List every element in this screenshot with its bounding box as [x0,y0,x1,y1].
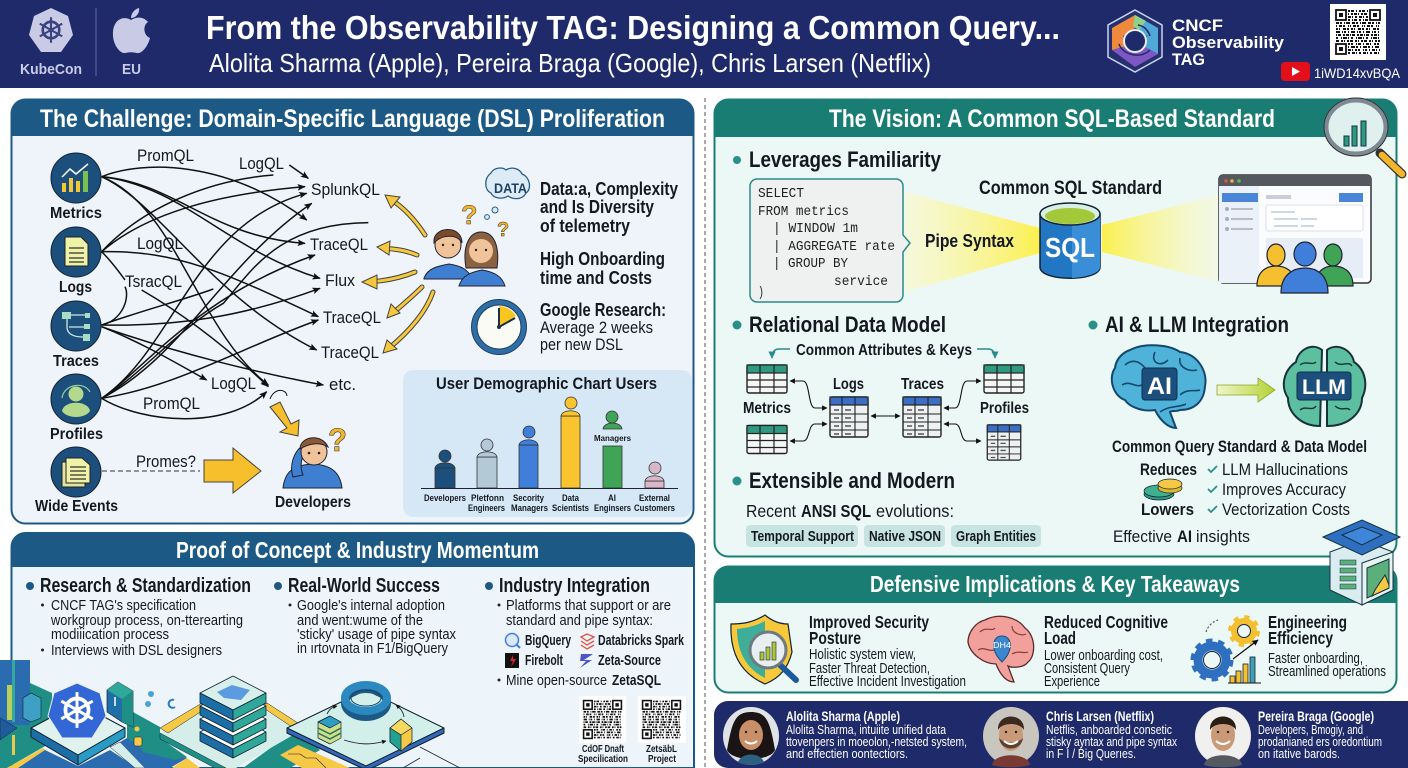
text: effective ai insights: Effective [1113,527,1172,546]
QR caption: spec: Specilication [578,754,628,765]
table: profiles top [984,365,1024,393]
text: complexity: Data:a, Complexity [540,178,679,199]
label: Databricks Spark: Databricks Spark [598,633,685,649]
chip: json: Native JSON [869,529,941,545]
panel header [11,533,694,567]
QR code [1330,4,1386,60]
CNCF label: TAG [1172,51,1205,69]
yellow arrowheads [362,195,400,353]
column: research: CNCF TAG's specification [51,597,196,614]
CNCF label: Observability [1172,34,1285,52]
icon: YouTube [1281,62,1310,81]
chart title: User Demographic Chart Users [436,374,657,393]
KubeCon label: KubeCon [20,61,82,78]
k8s logo [48,683,106,738]
icon: question marks: ? [497,219,509,241]
label: Logs: Logs [59,279,92,296]
text: complexity: of telemetry [540,215,631,236]
column: industry [485,575,685,689]
arrow: AI to LLM [1217,378,1275,402]
text: security posture [809,612,966,690]
code block: | GROUP BY [773,257,848,272]
DSL labels: PromQL [137,146,194,165]
icon: users [1257,242,1353,293]
text: ansi sql: evolutions: [876,501,954,521]
bio: Alolita: Alolita Sharma, intuiite unified data [786,723,946,737]
text: engineering efficiency: Engineering [1268,612,1347,632]
icon: question mark: ? [328,422,347,458]
column: research: Research & Standardization [40,575,251,597]
bio: Pereira: Pereira Braga (Google) [1258,708,1374,724]
header banner [0,0,1408,88]
chip: graph: Graph Entities [956,529,1036,545]
DSL labels: TraceQL [321,343,379,362]
column: industry: Industry Integration [499,575,650,597]
text: effective ai insights: insights [1196,527,1250,546]
text: ansi sql [746,501,954,521]
column: research: modiiication process [51,626,169,643]
text: google research: per new DSL [540,335,623,354]
benefit checks [1208,466,1217,512]
DSL labels: SplunkQL [311,180,380,199]
label: Developers: Developers [275,494,351,511]
heading: relational data model: Relational Data Model [749,312,946,337]
ring [345,685,387,717]
icon: magnifier [1324,98,1402,174]
text: cognitive load: Experience [1044,674,1100,690]
column: industry: Mine open-source [506,672,607,689]
icon: pink brain: DH4 [993,641,1012,650]
DSL labels: Flux [325,271,355,290]
benefits list: Improves Accuracy [1222,481,1347,499]
heading: leverages familiarity: Leverages Familiarity [749,147,942,172]
text: cognitive load: Reduced Cognitive [1044,612,1168,632]
label: pipe syntax: Pipe Syntax [925,230,1015,251]
ring platform [287,690,444,768]
bar label: managers: Managers [594,433,631,443]
icon: SQL database: SQL [1045,232,1095,263]
bio: Chris [1046,708,1178,761]
text: google research [540,299,666,354]
benefits list: Vectorization Costs [1222,501,1350,519]
code block: service [834,275,888,290]
icon: clock [472,300,526,354]
column: research [26,575,251,659]
icon: Apple logo [113,8,150,53]
bio: Alolita: ttovenpers in moeolon,-netsted system, [786,735,967,749]
panel: vision [714,98,1402,556]
benefits list: LLM Hallucinations [1222,461,1348,479]
section: extensible [732,476,742,486]
benefits list [1222,461,1350,519]
icon: SQL database [1040,203,1100,278]
table labels: Logs [833,376,864,393]
text: security posture: Improved Security [809,612,929,632]
axis labels: External [639,493,670,503]
chip: json [864,525,945,547]
icon: gears [1194,618,1261,683]
icon: confused users [424,229,505,286]
icon: LLM brain [1284,347,1365,426]
label: Traces: Traces [53,353,99,370]
chart: user demographic [403,370,692,517]
text: google research: Google Research: [540,299,666,320]
label: Wide Events: Wide Events [35,498,118,515]
photo: Chris [983,707,1039,767]
code block: | AGGREGATE rate [773,240,895,255]
DSL labels: LogQL [137,234,183,253]
column: real-world: Real-World Success [288,575,440,597]
yellow beams [905,192,1219,292]
bio: Pereira: on itative barods. [1258,747,1340,761]
icon: KubeCon logo [29,8,73,52]
chip: graph [951,525,1041,547]
icon: AI brain [1112,345,1206,428]
column: industry: standard and pipe syntax: [506,612,653,629]
text: security posture: Posture [809,628,861,648]
code block: ) [758,286,764,301]
attribute arrows [772,349,995,358]
title: From the Observability TAG: Designing a Common Query... [206,9,1060,46]
label: reduces: Reduces [1140,461,1197,479]
axis labels: Pletfonn [471,493,504,503]
DSL labels [125,146,381,471]
icon: Databricks [581,634,594,649]
text: ansi sql: ANSI SQL [801,501,871,521]
video id: 1iWD14xvBQA [1314,65,1401,81]
axis labels [424,493,675,513]
text: security posture: Effective Incident Investigation [809,674,966,690]
arrow: down to developers [270,390,299,436]
icon: Firebolt [505,653,519,668]
section: leverages familiarity [733,156,741,164]
section: ai [1088,320,1098,330]
text: complexity [540,178,679,236]
DSL labels: PromQL [143,394,200,413]
bars [435,397,664,488]
panel: defensive implications [714,566,1397,692]
heading: Defensive Implications & Key Takeaways [870,571,1240,597]
table labels: Profiles [980,400,1029,417]
axis labels: AI [608,493,616,503]
heading: Proof of Concept & Industry Momentum [176,537,539,563]
DSL labels: etc. [329,375,356,394]
QR caption: spec [578,744,628,765]
yellow arrows from users [368,199,433,349]
text: cognitive load: Consistent Query [1044,661,1131,677]
icon: shield [731,615,796,684]
table: metrics bottom [747,426,787,454]
axis labels: Scientists [552,503,589,513]
label: lowers: Lowers [1141,501,1194,519]
panel header [11,99,694,136]
text: engineering efficiency [1268,612,1386,680]
heading: ai: AI & LLM Integration [1105,312,1289,337]
code block: SELECT [758,187,804,202]
table: logs [830,397,868,437]
label: Profiles: Profiles [50,426,103,443]
label: common attributes: Common Attributes & Keys [796,342,972,359]
text: engineering efficiency: Efficiency [1268,628,1333,648]
bio: Chris: Chris Larsen (Netflix) [1046,708,1154,724]
pillar [107,682,133,727]
code block [750,179,910,302]
axis labels: Enginsers [594,503,631,513]
text: effective ai insights [1113,527,1250,546]
code block: | WINDOW 1m [773,222,858,237]
column: real-world: Google's internal adoption [297,597,445,614]
text: complexity: and Is Diversity [540,196,655,217]
column: research: workgroup process, on-tterearting [50,612,243,629]
EU label: EU [122,61,141,78]
photo: Alolita [723,707,779,765]
thought bubbles [485,207,498,219]
speakers subtitle: Alolita Sharma (Apple), Pereira Braga (Google), Chris Larsen (Netflix) [209,48,931,78]
label: Zeta-Source: Zeta-Source [598,653,661,669]
icon: data cloud: DATA [494,180,527,196]
icon: building with cap [1323,520,1400,605]
label: common sql standard: Common SQL Standard [979,178,1162,199]
icon: profiles [51,374,101,424]
small nodes [134,691,175,746]
QR code: spec [579,696,626,743]
column: real-world: in ırtovnata in F1/BigQuery [297,640,448,657]
k8s platform [31,703,125,765]
column: industry: ZetaSQL [612,672,661,689]
left tower [0,660,41,755]
bio: Alolita [786,708,967,761]
axis labels: Customers [634,503,675,513]
DSL labels: Promes? [136,452,196,471]
text: ansi sql: Recent [746,501,796,521]
bio: Chris: Netflis, anboarded consetic [1046,723,1172,737]
axis labels: Developers [424,493,466,503]
text: cognitive load: Lower onboarding cost, [1044,648,1163,664]
QR caption: zeta [646,744,677,765]
icon: confused developer [283,438,342,488]
label: Firebolt: Firebolt [525,653,563,669]
text: effective ai insights: AI [1177,527,1192,546]
text: onboarding [540,248,665,288]
table labels [743,376,1029,417]
table labels: Traces [901,376,944,393]
axis labels: Secority [513,493,544,503]
bio: Alolita: Alolita Sharma (Apple) [786,708,900,724]
label: Metrics: Metrics [50,205,102,222]
column: real-world: and went:wume of the [297,612,423,629]
table: metrics top [747,365,787,393]
column: industry: Platforms that support or are [506,597,671,614]
icon: wide events [51,447,101,497]
server stack [200,676,266,758]
icon: data cloud [486,168,529,199]
label: BigQuery: BigQuery [525,633,571,649]
icon: coins [1144,479,1182,500]
divider [704,98,706,768]
section: relational data model [732,320,742,330]
icon: metrics [51,153,101,203]
table labels: Metrics [743,400,791,417]
panel header [714,99,1397,137]
icon: LLM brain: LLM [1302,376,1346,399]
heading: extensible: Extensible and Modern [749,468,955,493]
column: real-world [274,575,456,657]
dashed link [102,470,200,472]
divider mark [95,8,97,76]
bio: Chris: stisky ayntax and pipe syntax [1046,735,1178,749]
DSL labels: TraceQL [310,235,368,254]
bio: Chris: in F I / Big Querıes. [1046,747,1136,761]
text: security posture: Faster Threat Detection, [809,661,930,677]
browser illustration [1219,175,1371,283]
DSL labels: LogQL [211,374,256,393]
QR code: zeta [638,696,686,743]
CNCF label: CNCF [1172,17,1223,35]
code block: FROM metrics [758,205,849,220]
text: security posture: Holistic system view, [809,647,916,663]
flow arrows [327,705,404,744]
cubes [318,716,412,751]
chip: temporal [746,525,858,547]
DSL labels: TraceQL [323,308,381,327]
QR caption: zeta: Project [648,754,677,765]
DSL labels: LogQL [239,154,284,173]
bio: Alolita: and effectien oontectiors. [786,747,908,761]
text: engineering efficiency: Faster onboarding, [1268,651,1363,667]
text: cognitive load [1044,612,1168,690]
icon: question marks [461,200,509,241]
column: research: Interviews with DSL designers [51,642,222,659]
icon: BigQuery [506,634,520,648]
text: onboarding: time and Costs [540,267,652,288]
panel header [714,566,1397,603]
text: cognitive load: Load [1044,628,1076,648]
axis labels: Data [562,493,580,503]
footer: speakers [714,701,1408,768]
CNCF label [1172,17,1285,69]
DSL labels: TsracQL [125,272,182,291]
icon: logs [51,227,101,277]
bio: Pereira: Developers, Bmogiy, and [1258,723,1363,737]
QR caption: zeta: ZetsäbL [646,744,677,755]
QR caption: spec: CdOF Dnaft [582,744,625,755]
illustration: isometric infrastructure [0,660,460,768]
icon: Zeta-Source [580,654,593,668]
table: profiles bottom [987,425,1021,460]
icon: question marks: ? [461,200,478,230]
panel: challenge [11,99,694,524]
table links [790,381,981,441]
icon: pink brain [968,616,1034,682]
icon: traces [51,301,101,351]
axis labels: Managers [511,503,548,513]
column: real-world: 'sticky' usage of pipe syntax [297,626,456,643]
photo: Pereira [1195,707,1251,767]
table: traces [903,397,941,437]
bio: Pereira [1258,708,1382,761]
axis labels: Engineers [468,503,505,513]
heading: The Challenge: Domain-Specific Language (DSL) Proliferation [40,105,665,133]
chip: temporal: Temporal Support [751,529,854,545]
text: onboarding: High Onboarding [540,248,665,269]
arrow: to developers [204,448,261,493]
spaghetti arrows [102,165,368,419]
axis [421,488,678,490]
icon: CNCF hexagon [1108,10,1162,72]
icon: AI brain: AI [1147,373,1172,400]
text: google research: Average 2 weeks [540,318,653,337]
heading: The Vision: A Common SQL-Based Standard [829,105,1275,133]
